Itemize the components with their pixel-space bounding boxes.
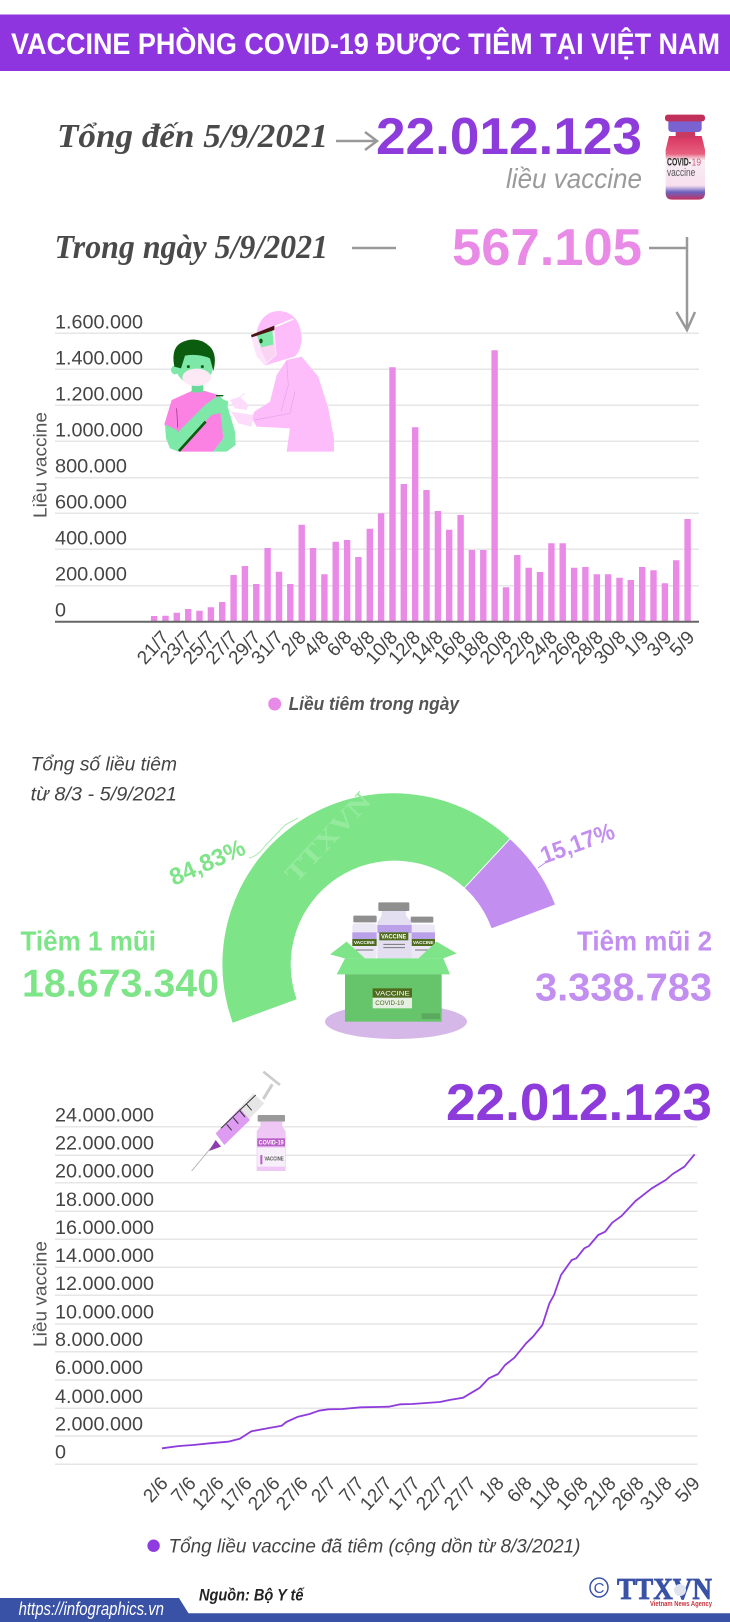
y axis labels: 1.000.000 — [55, 420, 143, 441]
line chart: cumulative doses — [30, 1106, 705, 1515]
y axis title: Liều vaccine — [30, 1241, 50, 1347]
vials — [352, 902, 435, 958]
x axis labels: 26/8 — [608, 1473, 649, 1515]
x axis labels: 8/8 — [346, 627, 379, 661]
x axis labels: 27/7 — [202, 627, 242, 669]
x axis labels: 7/7 — [335, 1473, 369, 1507]
icon: vaccine vial: COVID- — [667, 156, 691, 168]
logo: TTXVN — [590, 1571, 712, 1608]
y axis labels: 1.600.000 — [55, 312, 143, 333]
icon: vaccine vial — [665, 115, 705, 200]
vials: VACCINE — [413, 940, 434, 945]
patient — [164, 340, 236, 452]
y axis labels: 400.000 — [55, 528, 127, 549]
x axis labels: 12/7 — [356, 1473, 397, 1515]
watermark: TTXVN — [279, 786, 377, 888]
caption: doses: liều vaccine — [506, 163, 642, 194]
x axis labels: 1/8 — [475, 1473, 509, 1507]
arrow: total to number — [336, 132, 377, 150]
y axis labels: 1.400.000 — [55, 348, 143, 369]
x axis labels: 21/7 — [133, 627, 174, 669]
vial: VACCINE — [264, 1157, 284, 1163]
y axis labels: 800.000 — [55, 456, 127, 477]
y axis labels: 0 — [55, 1442, 66, 1463]
x axis labels: 21/8 — [580, 1473, 621, 1515]
x axis labels: 2/7 — [307, 1473, 341, 1507]
y axis labels: 0 — [55, 601, 66, 622]
footer bar with website — [0, 1598, 730, 1622]
x axis labels: 5/9 — [666, 627, 699, 661]
footer bar with website: https://infographics.vn — [19, 1599, 164, 1619]
box front — [345, 974, 442, 1022]
y axis labels: 1.200.000 — [55, 384, 143, 405]
stat: second dose — [535, 926, 712, 1010]
y axis labels: 18.000.000 — [55, 1190, 154, 1211]
arrow: daily number to chart — [649, 237, 695, 330]
x axis labels: 29/7 — [225, 627, 265, 669]
y axis labels: 10.000.000 — [55, 1302, 154, 1323]
y axis labels: 600.000 — [55, 492, 127, 513]
y axis labels: 4.000.000 — [55, 1387, 143, 1408]
stat: first dose — [20, 926, 219, 1006]
x axis labels: 5/9 — [671, 1473, 705, 1507]
x axis labels: 22/6 — [244, 1473, 285, 1515]
y axis labels: 22.000.000 — [55, 1134, 154, 1155]
x axis labels — [139, 1473, 705, 1515]
segment: second dose — [465, 839, 555, 928]
logo: TTXVN: C — [594, 1580, 605, 1597]
legend: cumulative doses: Tổng liều vaccine đã tiêm (cộng dồn từ 8/3/2021) — [168, 1537, 580, 1558]
icon: syringe and vial — [192, 1072, 286, 1171]
x axis labels: 2/8 — [278, 627, 311, 661]
y axis labels — [55, 312, 143, 622]
y axis labels: 24.000.000 — [55, 1106, 154, 1127]
x axis labels: 17/7 — [384, 1473, 425, 1515]
x axis labels: 28/8 — [568, 627, 608, 669]
syringe — [192, 1072, 280, 1171]
text: total doses caption: Tổng số liều tiêm — [31, 755, 177, 776]
logo: TTXVN: TTXVN — [617, 1571, 712, 1606]
bars — [154, 350, 688, 621]
x axis labels: 7/6 — [167, 1473, 201, 1507]
number: total doses: 22.012.123 — [376, 108, 642, 166]
y axis labels: 14.000.000 — [55, 1246, 154, 1267]
bar chart: daily doses — [30, 312, 699, 669]
x axis labels: 31/8 — [636, 1473, 677, 1515]
stat: second dose: Tiêm mũi 2 — [577, 926, 712, 957]
vials: VACCINE — [381, 934, 406, 940]
x axis labels: 30/8 — [590, 627, 631, 669]
x axis labels: 20/8 — [476, 627, 516, 669]
icon: vaccine vial: vaccine — [667, 167, 695, 179]
vials: VACCINE — [354, 940, 375, 945]
x axis labels: 6/8 — [323, 627, 357, 661]
title banner — [0, 14, 730, 71]
y axis labels — [55, 1106, 154, 1463]
vial — [257, 1115, 286, 1171]
y axis labels: 16.000.000 — [55, 1218, 154, 1239]
icon: vaccine box: VACCINE — [375, 990, 410, 997]
text: total doses caption — [31, 755, 177, 806]
x axis labels: 17/6 — [216, 1473, 257, 1515]
vial: COVID-19 — [259, 1139, 284, 1146]
box flaps — [330, 942, 457, 958]
x axis labels: 6/8 — [503, 1473, 537, 1507]
x axis labels: 4/8 — [300, 627, 334, 661]
illustration: health worker vaccinating patient — [164, 311, 334, 452]
stat: second dose: 3.338.783 — [535, 967, 712, 1010]
source note: Nguồn: Bộ Y tế — [199, 1586, 305, 1605]
x axis labels: 23/7 — [156, 627, 197, 669]
x axis labels: 26/8 — [545, 627, 585, 669]
icon: vaccine box: COVID-19 — [375, 1001, 405, 1007]
stat: first dose: Tiêm 1 mũi — [20, 926, 156, 957]
x axis labels: 2/6 — [139, 1473, 173, 1507]
segment: first dose — [222, 793, 510, 1023]
y axis labels: 6.000.000 — [55, 1358, 143, 1379]
heading: total to date: Tổng đến 5/9/2021 — [57, 118, 328, 155]
doctor — [230, 311, 334, 452]
line series — [162, 1154, 695, 1448]
y axis labels: 20.000.000 — [55, 1161, 154, 1182]
x axis labels: 22/7 — [412, 1473, 453, 1515]
x axis labels: 16/8 — [552, 1473, 593, 1515]
y axis labels: 200.000 — [55, 564, 127, 585]
y axis labels: 12.000.000 — [55, 1274, 154, 1295]
logo: TTXVN: Vietnam News Agency — [650, 1601, 712, 1608]
x axis labels: 12/6 — [188, 1473, 229, 1515]
number: cumulative total: 22.012.123 — [446, 1074, 712, 1132]
x axis labels: 10/8 — [362, 627, 402, 669]
x axis labels: 16/8 — [430, 627, 471, 669]
label: first dose percent — [165, 818, 298, 891]
x axis labels: 12/8 — [385, 627, 425, 669]
number: daily doses: 567.105 — [452, 219, 642, 277]
x axis labels: 24/8 — [522, 627, 562, 669]
x axis labels: 27/7 — [440, 1473, 481, 1515]
x axis labels: 25/7 — [179, 627, 219, 669]
x axis labels: 14/8 — [408, 627, 448, 669]
legend: daily doses: Liều tiêm trong ngày — [289, 693, 461, 714]
stat: first dose: 18.673.340 — [22, 963, 219, 1006]
x axis labels: 22/8 — [499, 627, 539, 669]
icon: vaccine box — [325, 902, 467, 1039]
chart: dose share gauge — [222, 786, 555, 1023]
x axis baseline — [55, 621, 699, 623]
x axis labels: 27/6 — [272, 1473, 313, 1515]
icon: vaccine vial: 19 — [692, 157, 701, 168]
x axis labels: 31/7 — [248, 627, 288, 669]
label: second dose percent: 15,17% — [537, 818, 618, 870]
heading: in the day: Trong ngày 5/9/2021 — [54, 229, 328, 266]
x axis labels: 1/9 — [620, 627, 654, 661]
y axis labels: 2.000.000 — [55, 1415, 143, 1436]
connector line: day — [352, 247, 396, 249]
x axis labels: 3/9 — [643, 627, 676, 661]
label: first dose percent: 84,83% — [165, 834, 250, 891]
x axis labels: 18/8 — [453, 627, 494, 669]
y axis labels: 8.000.000 — [55, 1330, 143, 1351]
y axis title: Liều vaccine — [30, 412, 50, 518]
x axis labels — [133, 627, 699, 669]
x axis labels: 11/8 — [525, 1473, 565, 1514]
text: total doses caption: từ 8/3 - 5/9/2021 — [31, 785, 177, 806]
